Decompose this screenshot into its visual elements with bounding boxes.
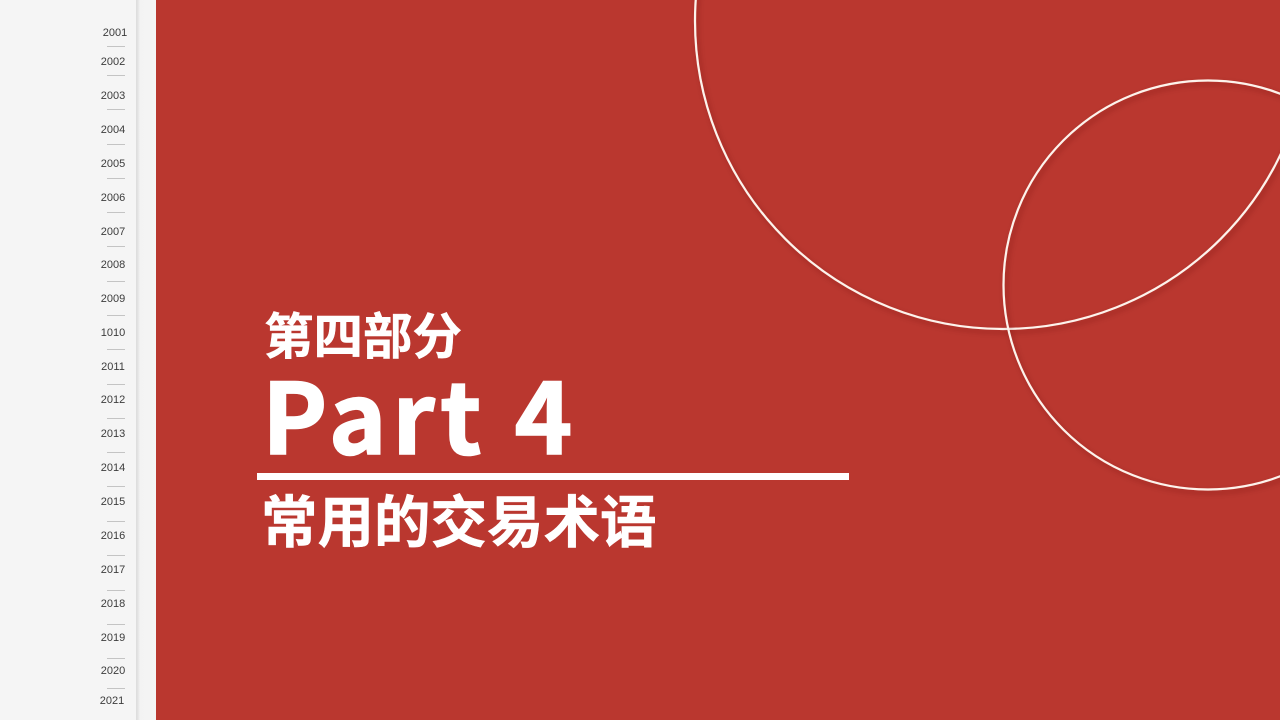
year labels: 2002 [101,56,125,68]
year labels: 2014 [101,462,125,474]
panel: year sidebar [0,0,136,720]
heading: section number: 第四部分 [264,310,462,365]
year labels [100,27,127,707]
heading: Part 4: Part 4 [262,341,578,483]
heading: section title: 常用的交易术语 [261,491,656,554]
year labels: 2018 [101,598,125,610]
year labels: 2015 [101,496,125,508]
year labels: 2012 [101,394,125,406]
year labels: 2011 [101,361,125,373]
year labels: 2021 [100,695,124,707]
year labels: 2005 [101,158,125,170]
year labels: 2016 [101,530,125,542]
year labels: 2001 [103,27,127,39]
year labels: 2006 [101,192,125,204]
year labels: 2004 [101,124,125,136]
sidebar divider [136,0,156,720]
year labels: 2009 [101,293,125,305]
year labels: 2003 [101,90,125,102]
year labels: 2008 [101,259,125,271]
title underline [257,473,849,480]
year labels: 2017 [101,564,125,576]
year labels: 2019 [101,632,125,644]
year labels: 2020 [101,665,125,677]
year labels: 1010 [101,327,125,339]
year labels: 2007 [101,226,125,238]
year labels: 2013 [101,428,125,440]
